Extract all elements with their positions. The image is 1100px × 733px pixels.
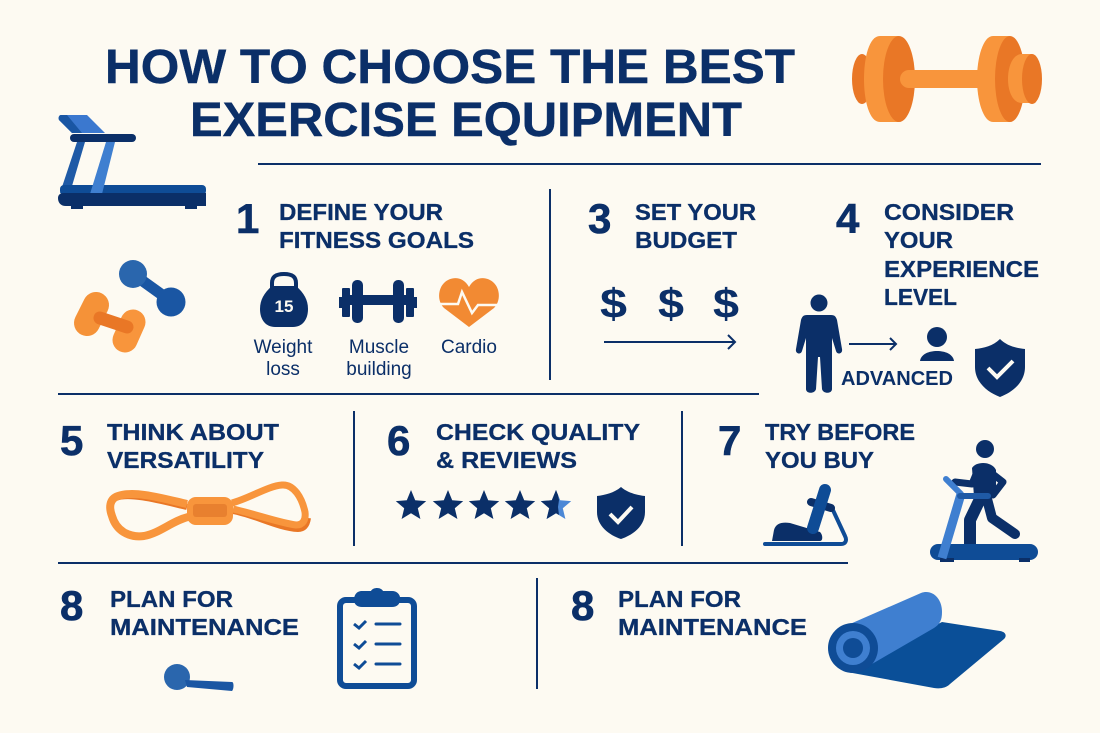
panel: step 4 experience: 4 (836, 195, 860, 242)
label: muscle building: Muscle (349, 337, 409, 358)
panel: step 4 experience (796, 195, 1039, 397)
icon: heart with pulse (438, 278, 500, 327)
panel: step 8 maintenance left: 8 (60, 582, 83, 629)
panel: step 6 quality: & REVIEWS (436, 447, 577, 473)
label: cardio: Cardio (441, 337, 497, 358)
panel: step 5 versatility: THINK ABOUT (107, 419, 280, 445)
icon: treadmill (58, 115, 206, 209)
rating stars (396, 490, 571, 519)
panel: step 6 quality: 6 (387, 417, 410, 464)
icon: small hand weight (164, 664, 234, 691)
panel: step 3 budget: BUDGET (635, 227, 738, 253)
panel: step 4 experience: EXPERIENCE (884, 256, 1039, 282)
panel: step 8 maintenance left (60, 582, 414, 691)
label: weight loss: loss (266, 359, 300, 380)
icon: person on treadmill (930, 440, 1038, 562)
icon: person (796, 294, 842, 393)
title: EXERCISE EQUIPMENT (190, 94, 742, 147)
icon: shield check (975, 339, 1025, 397)
icon: seated machine (765, 490, 846, 544)
panel: step 1 fitness goals (236, 195, 500, 380)
panel: step 7 try before you buy: 7 (718, 417, 741, 464)
arrow: rising cost (604, 335, 735, 349)
panel: step 4 experience: CONSIDER (884, 199, 1014, 225)
panel: step 8 maintenance left: PLAN FOR (110, 586, 233, 612)
panel: step 5 versatility (60, 417, 308, 536)
title: HOW TO CHOOSE THE BEST (105, 41, 795, 94)
panel: step 8 maintenance right: MAINTENANCE (618, 614, 807, 640)
dollar signs (600, 280, 739, 327)
icon: yoga mat (828, 592, 1006, 688)
panel: step 5 versatility: 5 (60, 417, 83, 464)
panel: step 4 experience: LEVEL (884, 284, 957, 310)
panel: step 3 budget (588, 195, 756, 349)
icon: orange barbell (852, 36, 1042, 122)
panel: step 7 try before you buy: YOU BUY (765, 447, 874, 473)
panel: step 7 try before you buy: TRY BEFORE (765, 419, 915, 445)
panel: step 3 budget: 3 (588, 195, 611, 242)
icon: kettlebell (260, 274, 308, 327)
panel: step 6 quality: CHECK QUALITY (436, 419, 640, 445)
arrow: progression (849, 338, 896, 350)
panel: step 1 fitness goals: DEFINE YOUR (279, 199, 443, 225)
panel: step 8 maintenance left: MAINTENANCE (110, 614, 299, 640)
label: advanced: ADVANCED (841, 367, 953, 390)
icon: advanced person (920, 327, 954, 361)
panel: step 8 maintenance right (571, 582, 1006, 688)
panel: step 7 try before you buy (718, 417, 1038, 562)
icon: barbell (339, 280, 417, 323)
panel: step 4 experience: YOUR (884, 227, 953, 253)
panel: step 8 maintenance right: 8 (571, 582, 594, 629)
icon: kettlebell: 15 (275, 297, 293, 316)
dollar signs: $ (713, 280, 739, 327)
label: muscle building: building (346, 359, 412, 380)
panel: step 6 quality (387, 417, 645, 539)
panel: step 5 versatility: VERSATILITY (107, 447, 264, 473)
dollar signs: $ (658, 280, 684, 327)
panel: step 3 budget: SET YOUR (635, 199, 756, 225)
panel: step 1 fitness goals: 1 (236, 195, 259, 242)
panel: step 1 fitness goals: FITNESS GOALS (279, 227, 474, 253)
dollar signs: $ (600, 280, 627, 327)
icon: resistance band (110, 485, 308, 536)
icon: shield check (597, 487, 645, 539)
icon: clipboard checklist (340, 588, 414, 686)
icon: small dumbbells (87, 260, 186, 340)
label: weight loss: Weight (254, 337, 312, 358)
title (105, 41, 795, 147)
panel: step 8 maintenance right: PLAN FOR (618, 586, 741, 612)
